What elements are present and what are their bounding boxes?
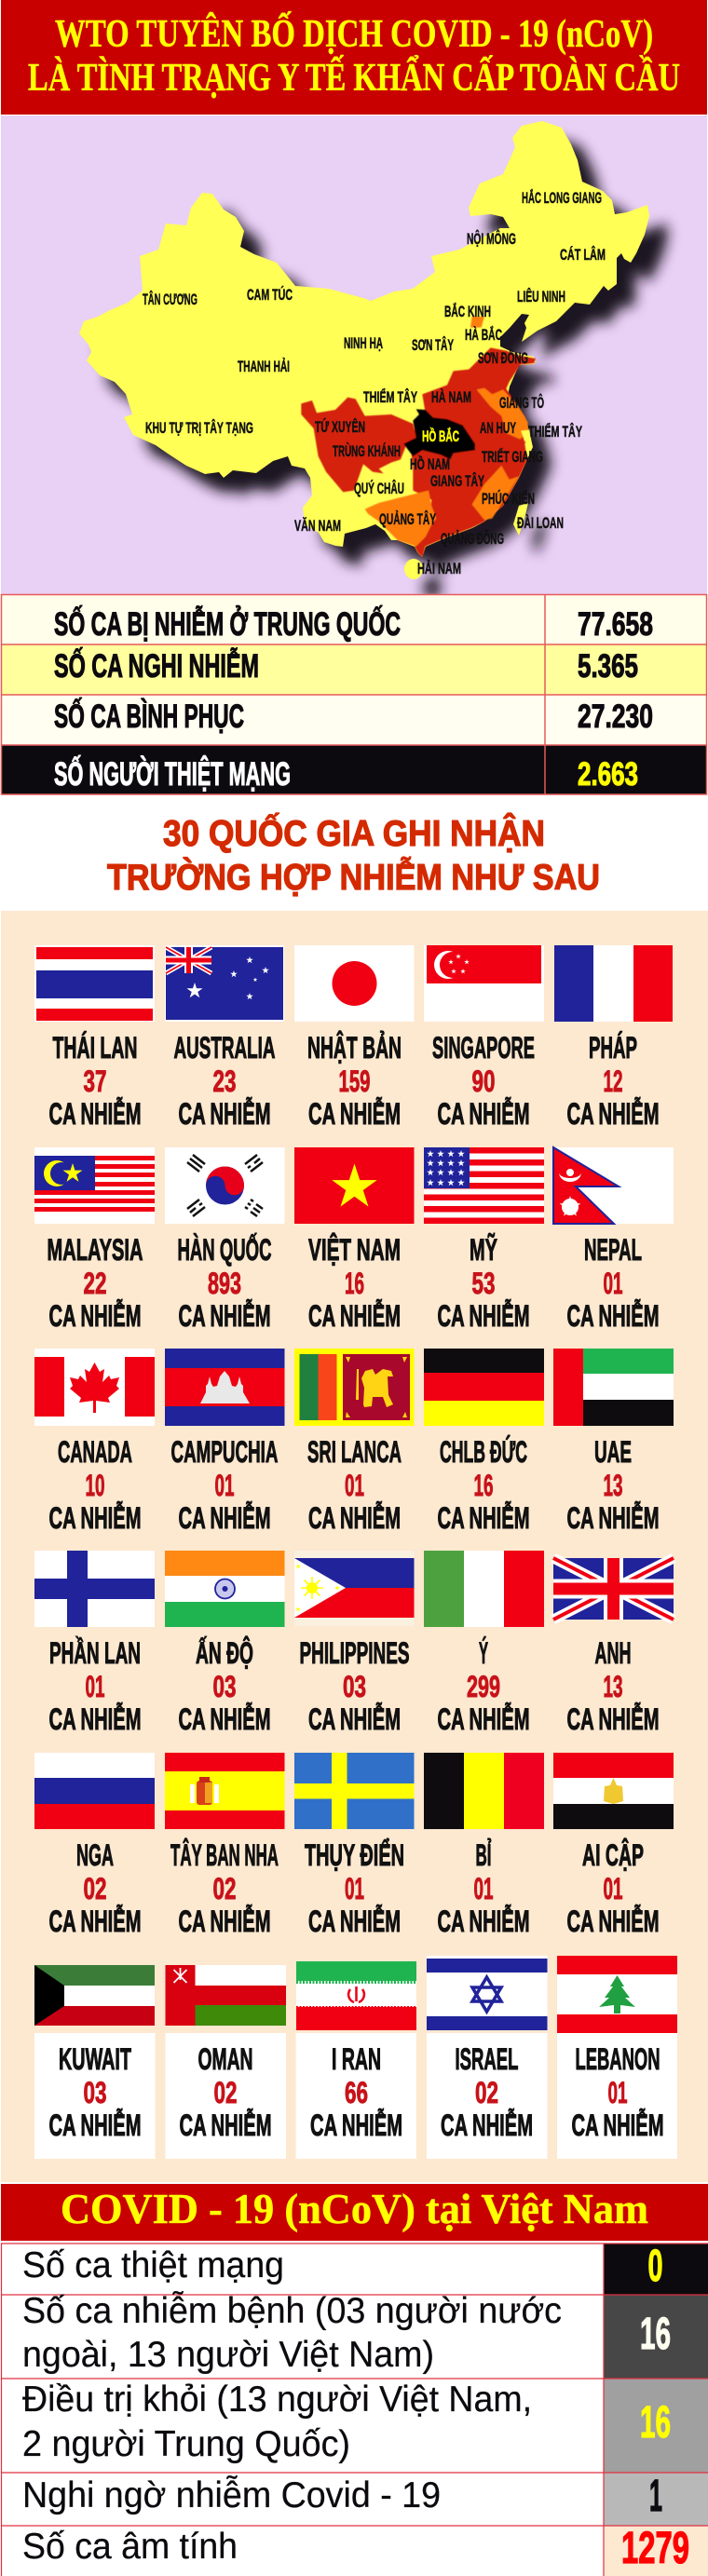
- region: Hubei black: [403, 409, 475, 459]
- country: Sri Lanca: SRI LANCA: [307, 1435, 402, 1469]
- country: Australia: AUSTRALIA: [173, 1031, 276, 1064]
- country: Kuwait: 03: [84, 2076, 106, 2109]
- province labels: TRÙNG KHÁNH: [333, 442, 401, 460]
- region: Beijing orange: [470, 317, 484, 328]
- province labels: NỘI MÔNG: [467, 230, 516, 248]
- country: Singapore: 90: [471, 1064, 496, 1098]
- country: Ý: [424, 1551, 544, 1736]
- country: Bỉ: [424, 1753, 544, 1938]
- country: Israel: ISRAEL: [455, 2042, 518, 2076]
- flag: Spain: [165, 1753, 285, 1829]
- flag: USA: [424, 1147, 544, 1224]
- province labels: SƠN TÂY: [412, 336, 454, 354]
- country: Pháp: PHÁP: [589, 1031, 637, 1064]
- flag: South Korea: [165, 1147, 285, 1224]
- province labels: BẮC KINH: [444, 303, 491, 320]
- country: Việt Nam: CA NHIỄM: [308, 1299, 401, 1333]
- flag: Sweden: [294, 1753, 414, 1829]
- flag: Oman: [166, 1965, 286, 2026]
- country: I Ran: 66: [345, 2076, 368, 2109]
- row: suspected: 5.365: [578, 648, 638, 685]
- country: UAE: 13: [604, 1469, 622, 1502]
- country: Nepal: [553, 1147, 674, 1333]
- flag: Iran: [296, 1961, 416, 2030]
- row: suspected: Nghi ngờ nhiễm Covid - 19: [22, 2475, 441, 2515]
- country: Tây Ban Nha: TÂY BAN NHA: [170, 1838, 279, 1872]
- country: Kuwait: KUWAIT: [59, 2042, 131, 2076]
- country: Hàn Quốc: CA NHIỄM: [179, 1299, 270, 1333]
- card: I Ran: [296, 2033, 416, 2159]
- province labels: THIỂM TÂY: [528, 423, 582, 441]
- country: Ấn Độ: [165, 1551, 285, 1736]
- region: Sichuan red: [301, 398, 416, 492]
- country: Singapore: SINGAPORE: [432, 1031, 535, 1064]
- province labels: CÁT LÂM: [560, 246, 606, 264]
- country: Mỹ: CA NHIỄM: [438, 1299, 529, 1333]
- flag: Singapore: [424, 945, 544, 1022]
- country: Sri Lanca: CA NHIỄM: [308, 1501, 401, 1535]
- country: Australia: [165, 945, 284, 1131]
- region: Shanghai yellow: [521, 430, 531, 441]
- flag: Philippines: [294, 1551, 414, 1626]
- flag: France: [554, 945, 673, 1022]
- country: I Ran: CA NHIỄM: [310, 2108, 402, 2142]
- flag: Canada: [34, 1349, 155, 1426]
- row: deaths: 2.663: [578, 756, 638, 793]
- country: Việt Nam: 16: [345, 1267, 364, 1300]
- country: Singapore: CA NHIỄM: [438, 1097, 529, 1131]
- row: infected: [22, 2291, 671, 2375]
- country: Bỉ: CA NHIỄM: [438, 1905, 529, 1938]
- row: recovered: 16: [640, 2398, 671, 2447]
- province labels: SƠN ĐỒNG: [478, 349, 528, 367]
- country: Thái Lan: 37: [84, 1064, 106, 1098]
- country: Canada: [34, 1349, 155, 1535]
- country: UAE: UAE: [594, 1435, 632, 1469]
- panel: China map: [1, 115, 707, 598]
- country: Ấn Độ: CA NHIỄM: [179, 1702, 270, 1736]
- heading: 30 countries: 30 QUỐC GIA GHI NHẬN: [163, 812, 545, 854]
- row: infected: SỐ CA BỊ NHIỄM Ở TRUNG QUỐC: [54, 605, 401, 643]
- region: Fujian orange: [472, 466, 519, 520]
- flag: Kuwait: [34, 1965, 155, 2026]
- country: Lebanon: [557, 1956, 677, 2159]
- card: Kuwait: [34, 2033, 155, 2159]
- country: Oman: [166, 1965, 286, 2159]
- province labels: HỒ NAM: [410, 455, 450, 473]
- province labels: [143, 189, 606, 577]
- province labels: HẮC LONG GIANG: [522, 189, 602, 207]
- country: Việt Nam: [294, 1147, 414, 1333]
- country: Mỹ: [424, 1147, 544, 1333]
- country: Ý: 299: [467, 1670, 500, 1703]
- country: Lebanon: 01: [607, 2076, 628, 2109]
- flag: Germany: [424, 1349, 544, 1426]
- row: infected: 77.658: [578, 606, 653, 643]
- province labels: GIANG TÂY: [430, 472, 484, 490]
- country: Malaysia: 22: [84, 1267, 106, 1300]
- row: infected: ngoài, 13 người Việt Nam): [22, 2335, 434, 2375]
- country: Australia: CA NHIỄM: [179, 1097, 270, 1131]
- country: Pháp: 12: [604, 1064, 622, 1098]
- country: Hàn Quốc: 893: [208, 1267, 241, 1300]
- country: Sri Lanca: 01: [345, 1469, 364, 1502]
- panel: countries: [1, 911, 708, 2182]
- country: Bỉ: 01: [473, 1872, 494, 1905]
- country: Anh: [553, 1558, 674, 1736]
- province labels: LIÊU NINH: [517, 288, 565, 305]
- card: Israel: [427, 2033, 548, 2159]
- country: Ai Cập: [553, 1753, 674, 1938]
- country: Ý: CA NHIỄM: [438, 1702, 529, 1736]
- country: Kuwait: [34, 1965, 155, 2159]
- flag: Belgium: [424, 1753, 544, 1829]
- row: recovered: 27.230: [578, 698, 653, 735]
- flag: United Kingdom: [553, 1558, 674, 1620]
- row: recovered: [22, 2379, 671, 2464]
- province labels: TỨ XUYÊN: [315, 418, 365, 436]
- province labels: NINH HẠ: [344, 335, 383, 352]
- country: Oman: OMAN: [197, 2042, 253, 2076]
- country: Thái Lan: THÁI LAN: [52, 1031, 138, 1064]
- country: Canada: CANADA: [58, 1435, 132, 1469]
- card: Lebanon: [557, 2033, 677, 2159]
- country: Phần Lan: PHẦN LAN: [49, 1636, 141, 1670]
- flag: Japan: [294, 945, 414, 1022]
- row: infected: Số ca nhiễm bệnh (03 người nước: [22, 2291, 562, 2331]
- country: Thụy Điển: THỤY ĐIỂN: [305, 1838, 404, 1872]
- flag: Sri Lanka: [294, 1349, 414, 1426]
- province labels: QUẢNG ĐÔNG: [441, 530, 504, 548]
- country: Oman: CA NHIỄM: [179, 2108, 272, 2142]
- country: Mỹ: 53: [471, 1267, 496, 1300]
- row: negative: [22, 2524, 689, 2573]
- row: recovered: [54, 698, 653, 735]
- country: Anh: 13: [604, 1670, 622, 1703]
- country: Nhật Bản: NHẬT BẢN: [307, 1031, 402, 1064]
- country: Anh: ANH: [594, 1636, 632, 1670]
- row: suspected: 1: [649, 2472, 662, 2521]
- province labels: QUẢNG TÂY: [379, 510, 436, 528]
- flag: Nepal: [553, 1147, 674, 1224]
- country: Ấn Độ: 03: [212, 1670, 237, 1703]
- country: Hàn Quốc: HÀN QUỐC: [177, 1233, 272, 1267]
- country: Israel: CA NHIỄM: [441, 2108, 533, 2142]
- province labels: CAM TÚC: [247, 286, 293, 304]
- country: Thụy Điển: [294, 1753, 414, 1938]
- province labels: KHU TỰ TRỊ TÂY TẠNG: [145, 419, 253, 437]
- card: Oman: [166, 2033, 286, 2159]
- flag: Lebanon: [557, 1956, 677, 2033]
- map shadow: [98, 140, 668, 598]
- country: Philippines: CA NHIỄM: [308, 1702, 401, 1736]
- country: I Ran: I RAN: [332, 2042, 381, 2076]
- province labels: ĐÀI LOAN: [517, 514, 564, 532]
- country: Thụy Điển: 01: [345, 1872, 364, 1905]
- country: Canada: CA NHIỄM: [48, 1501, 142, 1535]
- country: Tây Ban Nha: 02: [212, 1872, 237, 1905]
- flag: Australia: [165, 945, 284, 1022]
- region: eastern red provinces: [410, 347, 536, 557]
- map of China: [79, 121, 649, 579]
- country: Campuchia: CAMPUCHIA: [171, 1435, 278, 1469]
- flag: Russia: [34, 1753, 155, 1829]
- province labels: QUÝ CHÂU: [354, 480, 404, 497]
- country: Ấn Độ: ẤN ĐỘ: [196, 1636, 253, 1670]
- row: recovered: SỐ CA BÌNH PHỤC: [54, 698, 244, 735]
- flag: Egypt: [553, 1753, 674, 1829]
- country: Singapore: [424, 945, 544, 1131]
- country: Nhật Bản: CA NHIỄM: [308, 1097, 401, 1131]
- country: Israel: [427, 1956, 548, 2159]
- province labels: THANH HẢI: [238, 358, 290, 375]
- flag: Thailand: [34, 945, 155, 1022]
- country: Campuchia: [165, 1349, 285, 1535]
- province labels: VĂN NAM: [294, 517, 341, 535]
- country: Ai Cập: 01: [604, 1872, 622, 1905]
- flag: Italy: [424, 1551, 544, 1627]
- country: Nga: 02: [84, 1872, 106, 1905]
- country: Malaysia: [34, 1147, 155, 1333]
- row: negative: Số ca âm tính: [22, 2527, 238, 2567]
- country: Ai Cập: AI CẬP: [582, 1838, 644, 1872]
- region: Guangxi orange: [365, 491, 436, 547]
- country: Việt Nam: VIỆT NAM: [308, 1233, 401, 1267]
- country: Thái Lan: [34, 945, 155, 1131]
- row: suspected: SỐ CA NGHI NHIỄM: [54, 647, 259, 685]
- country: Phần Lan: CA NHIỄM: [48, 1702, 142, 1736]
- country: Sri Lanca: [294, 1349, 414, 1535]
- country: UAE: [553, 1349, 674, 1535]
- country: Campuchia: CA NHIỄM: [179, 1501, 270, 1535]
- province labels: HẢI NAM: [417, 560, 461, 577]
- province labels: GIANG TÔ: [499, 394, 544, 412]
- header banner: [1, 0, 707, 115]
- table: Vietnam statistics: [1, 2242, 708, 2576]
- country: Philippines: [294, 1551, 414, 1736]
- row: recovered: Điều trị khỏi (13 người Việt Nam,: [22, 2379, 532, 2420]
- flag: Cambodia: [165, 1349, 285, 1426]
- province labels: PHÚC KIẾN: [482, 490, 535, 508]
- row: deaths: [54, 755, 638, 793]
- country: Canada: 10: [86, 1469, 104, 1502]
- row: recovered: 2 người Trung Quốc): [22, 2424, 350, 2464]
- country: Philippines: PHILIPPINES: [300, 1636, 410, 1670]
- flag: Vietnam: [294, 1147, 414, 1224]
- country: Nepal: NEPAL: [584, 1233, 642, 1267]
- country: CHLB Đức: CHLB ĐỨC: [440, 1435, 527, 1469]
- country: Mỹ: MỸ: [470, 1233, 497, 1267]
- country: Malaysia: CA NHIỄM: [48, 1299, 142, 1333]
- country: Pháp: [554, 945, 673, 1131]
- country: I Ran: [296, 1961, 416, 2159]
- province labels: HÀ BẮC: [465, 326, 502, 344]
- province labels: TRIẾT GIANG: [482, 448, 543, 466]
- province labels: THIỂM TÂY: [363, 388, 417, 406]
- country: Thụy Điển: CA NHIỄM: [308, 1905, 401, 1938]
- country: CHLB Đức: CA NHIỄM: [438, 1501, 529, 1535]
- country: CHLB Đức: [424, 1349, 544, 1535]
- country: Nga: [34, 1753, 155, 1938]
- country: Philippines: 03: [343, 1670, 366, 1703]
- country: Oman: 02: [214, 2076, 237, 2109]
- country: CHLB Đức: 16: [473, 1469, 494, 1502]
- flag: UAE: [553, 1349, 674, 1426]
- flag: Malaysia: [34, 1147, 155, 1224]
- row: deaths: [22, 2242, 663, 2291]
- country: Australia: 23: [212, 1064, 237, 1098]
- flag: Finland: [34, 1551, 155, 1627]
- country: Israel: 02: [475, 2076, 498, 2109]
- province labels: TÂN CƯƠNG: [143, 291, 197, 308]
- banner: COVID in Vietnam: COVID - 19 (nCoV) tại Việt Nam: [61, 2185, 648, 2232]
- province labels: HÀ NAM: [431, 388, 471, 406]
- country: Nepal: 01: [604, 1267, 622, 1300]
- country: Nhật Bản: [294, 945, 414, 1131]
- row: deaths: SỐ NGƯỜI THIỆT MẠNG: [54, 755, 291, 793]
- heading: 30 countries: TRƯỜNG HỢP NHIỄM NHƯ SAU: [107, 857, 600, 898]
- province labels: HỒ BẮC: [422, 427, 459, 445]
- country: Phần Lan: 01: [86, 1670, 104, 1703]
- country: Bỉ: BỈ: [475, 1838, 492, 1872]
- country: Hàn Quốc: [165, 1147, 285, 1333]
- country: Tây Ban Nha: CA NHIỄM: [179, 1905, 270, 1938]
- row: deaths: Số ca thiệt mạng: [22, 2245, 284, 2285]
- row: suspected: [22, 2472, 662, 2521]
- country: Kuwait: CA NHIỄM: [48, 2108, 142, 2142]
- country: Tây Ban Nha: [165, 1753, 285, 1938]
- country: Nhật Bản: 159: [339, 1064, 371, 1098]
- heading: 30 countries: [107, 812, 600, 898]
- flag: India: [165, 1551, 285, 1627]
- country: Campuchia: 01: [214, 1469, 235, 1502]
- country: Malaysia: MALAYSIA: [47, 1233, 143, 1267]
- country: Nga: CA NHIỄM: [48, 1905, 142, 1938]
- country: Nga: NGA: [76, 1838, 114, 1872]
- table: China statistics: [1, 594, 707, 794]
- region: Jiangsu orange: [477, 388, 528, 440]
- flag: Israel: [427, 1956, 548, 2030]
- country: Ý: Ý: [479, 1636, 488, 1670]
- row: suspected: [54, 647, 638, 685]
- province labels: AN HUY: [480, 420, 516, 437]
- country: Phần Lan: [34, 1551, 155, 1736]
- country: Thái Lan: CA NHIỄM: [48, 1097, 142, 1131]
- row: infected: 16: [640, 2310, 671, 2359]
- row: deaths: 0: [648, 2242, 663, 2291]
